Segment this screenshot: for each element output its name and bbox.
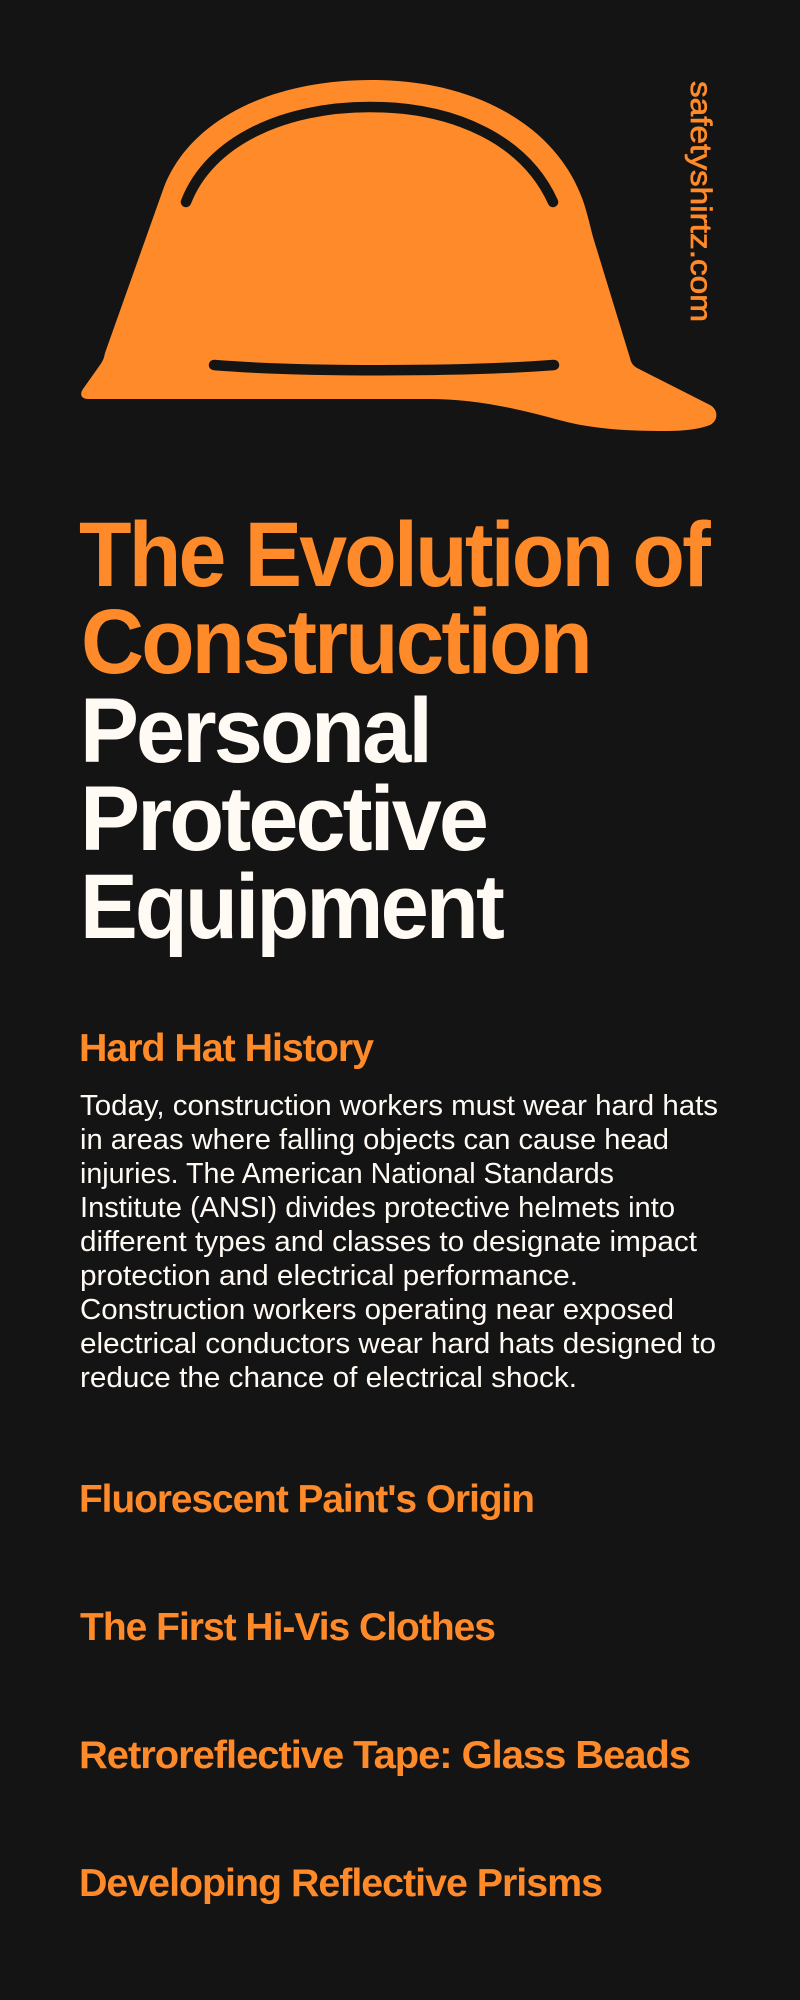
icon: hard hat (81, 80, 716, 431)
body text: Institute (ANSI) divides protective helmets into (80, 1192, 675, 1224)
section: hard hat history (79, 1027, 718, 1394)
heading: retroreflective tape: Retroreflective Tape: Glass Beads (79, 1734, 690, 1777)
title line: orange (79, 504, 711, 693)
body text: injuries. The American National Standards (80, 1158, 614, 1190)
heading: fluorescent paint's origin: Fluorescent Paint's Origin (79, 1478, 534, 1521)
body text: Today, construction workers must wear hard hats (80, 1090, 718, 1122)
heading: the first hi-vis clothes: The First Hi-Vis Clothes (80, 1606, 495, 1649)
title (79, 504, 711, 958)
title line: orange: The Evolution of (79, 504, 711, 606)
body text: in areas where falling objects can cause head (80, 1124, 669, 1156)
title line: white: Personal (80, 680, 430, 782)
body text (80, 1090, 718, 1394)
body text: electrical conductors wear hard hats designed to (80, 1328, 716, 1360)
body text: different types and classes to designate impact (80, 1226, 697, 1258)
heading: developing reflective prisms: Developing Reflective Prisms (79, 1862, 602, 1905)
heading: hard hat history: Hard Hat History (79, 1027, 375, 1070)
website label: safetyshirtz.com (684, 81, 717, 322)
title line: white: Protective (80, 768, 487, 870)
body text: Construction workers operating near exposed (80, 1294, 674, 1326)
body text: reduce the chance of electrical shock. (80, 1362, 577, 1394)
title line: orange: Construction (81, 591, 590, 693)
title line: white (80, 680, 504, 958)
title line: white: Equipment (80, 856, 504, 958)
body text: protection and electrical performance. (80, 1260, 578, 1292)
